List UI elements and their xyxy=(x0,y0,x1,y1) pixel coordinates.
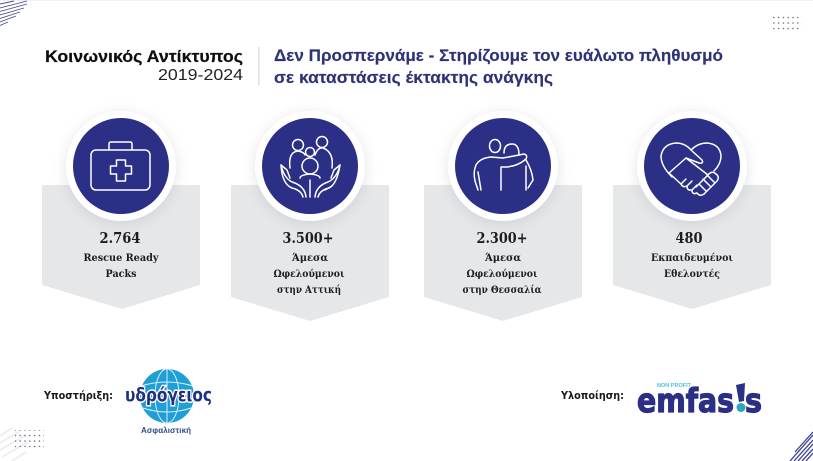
label: direct beneficiaries in Thessaly: στην Θεσσαλία xyxy=(462,283,542,296)
circle badge: handshake heart xyxy=(637,111,747,224)
circle badge: medical kit xyxy=(66,111,176,224)
decoration: bottom-left pale stripes xyxy=(0,428,28,461)
decoration: bottom-left dots xyxy=(15,430,44,447)
label: direct beneficiaries in Thessaly xyxy=(462,252,542,296)
label: rescue ready packs: Rescue Ready xyxy=(84,252,159,264)
decoration: bottom-right stripes xyxy=(790,432,813,461)
panel: beneficiaries in Attica xyxy=(231,111,389,321)
title: impact heading xyxy=(45,47,243,84)
icon: first aid kit xyxy=(91,142,150,190)
logo: emfasis non profit: emfas xyxy=(637,381,734,420)
logo: ydrogeios insurance: υδρόγειος xyxy=(125,384,212,406)
label: direct beneficiaries in Attica: Άμεσα xyxy=(291,252,328,264)
label: direct beneficiaries in Thessaly: Άμεσα xyxy=(484,252,521,264)
support label: Υποστήριξη: xyxy=(43,390,113,402)
icon: hands holding people xyxy=(281,136,340,197)
logo: emfasis non profit: NON PROFIT xyxy=(657,383,692,389)
label: direct beneficiaries in Attica: Ωφελούμενοι xyxy=(274,268,344,280)
implementation label: Υλοποίηση: xyxy=(560,390,624,402)
icon: handshake heart xyxy=(661,143,721,195)
statistic: 2.300+: 2.300+ xyxy=(476,229,528,247)
statistic: 3.500+: 3.500+ xyxy=(282,229,334,247)
panel: beneficiaries in Thessaly xyxy=(424,111,582,321)
statistic: 480: 480 xyxy=(676,229,702,247)
panel: rescue ready packs xyxy=(42,111,200,309)
label: direct beneficiaries in Thessaly: Ωφελούμενοι xyxy=(466,268,538,280)
label: rescue ready packs: Packs xyxy=(106,268,137,280)
circle badge: supporting friends xyxy=(448,111,558,224)
statistic: 2.764: 2.764 xyxy=(100,229,140,247)
subtitle: vulnerable population support: Δεν Προσπερνάμε - Στηρίζουμε τον ευάλωτο πληθυσμό xyxy=(274,46,723,65)
icon: arm around shoulder xyxy=(474,140,533,190)
subtitle: vulnerable population support: σε καταστάσεις έκτακτης ανάγκης xyxy=(274,68,553,87)
decoration: top-left stripes xyxy=(0,1,27,26)
logo: emfasis non profit: s xyxy=(745,381,762,420)
label: direct beneficiaries in Attica xyxy=(274,252,344,296)
title: impact heading: Κοινωνικός Αντίκτυπος xyxy=(45,47,243,66)
label: trained volunteers: Εκπαιδευμένοι xyxy=(651,252,733,264)
logo: ydrogeios insurance xyxy=(125,369,212,435)
subtitle: vulnerable population support xyxy=(274,46,723,87)
logo: ydrogeios insurance: Ασφαλιστική xyxy=(141,426,191,435)
divider xyxy=(258,47,260,85)
label: trained volunteers: Εθελοντές xyxy=(664,268,720,280)
circle badge: family in hands xyxy=(255,111,365,224)
decoration: top-right dots xyxy=(773,13,802,30)
title: impact heading: 2019-2024 xyxy=(158,67,243,84)
label: direct beneficiaries in Attica: στην Αττική xyxy=(277,283,341,296)
label: trained volunteers xyxy=(651,252,733,280)
panel: trained volunteers xyxy=(613,111,771,309)
label: rescue ready packs xyxy=(84,252,159,280)
